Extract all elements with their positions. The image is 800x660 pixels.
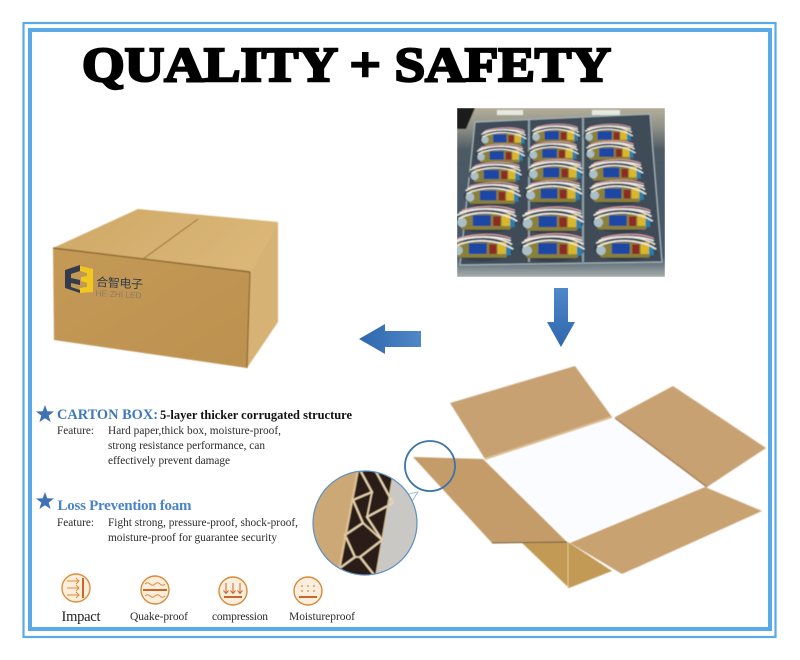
heading: carton box: CARTON BOX:	[57, 407, 158, 423]
icon: star	[36, 492, 54, 509]
feature text: foam: moisture-proof for guarantee security	[108, 532, 277, 544]
logo text	[95, 274, 144, 300]
heading: loss prevention foam: Loss Prevention foam	[58, 498, 192, 514]
feature text: foam: Fight strong, pressure-proof, shock-proof,	[108, 517, 298, 529]
open carton box	[413, 366, 766, 588]
loss prevention foam feature block	[36, 492, 298, 544]
subheading: structure: 5-layer thicker corrugated structure	[160, 408, 352, 422]
icon: quake-proof	[141, 576, 169, 604]
icon: star	[36, 405, 54, 422]
photo: LED drivers in a plastic tray	[451, 108, 665, 277]
logo text: HE·ZHI LED	[95, 288, 142, 300]
label: moistureproof: Moistureproof	[289, 611, 355, 623]
logo text: 合智电子	[96, 274, 144, 291]
logo mark	[65, 265, 93, 293]
carton box feature block	[36, 405, 352, 467]
connector from ring to detail circle	[409, 492, 418, 503]
arrow: open carton left to closed box	[359, 324, 421, 354]
icon: compression	[219, 577, 247, 605]
icon: moistureproof	[294, 577, 322, 605]
label: quake-proof: Quake-proof	[130, 611, 188, 623]
feature text: carton box: Hard paper,thick box, moisture-proof,	[108, 425, 281, 437]
title: QUALITY + SAFETY	[82, 37, 611, 92]
icon: impact	[62, 574, 90, 602]
feature text: carton box: effectively prevent damage	[108, 455, 230, 467]
magnifier ring on carton corner	[405, 441, 455, 491]
feature text: carton box	[57, 425, 281, 467]
corrugated cross-section detail	[310, 470, 418, 576]
closed carton box with logo	[53, 209, 278, 368]
feature text: foam	[57, 517, 298, 544]
label: impact: Impact	[62, 609, 100, 625]
feature text: carton box: Feature:	[57, 425, 94, 437]
label: compression: compression	[212, 611, 268, 623]
arrow: tray down to open carton	[547, 288, 575, 347]
feature text: carton box: strong resistance performance, can	[108, 440, 265, 452]
feature text: foam: Feature:	[57, 517, 94, 529]
